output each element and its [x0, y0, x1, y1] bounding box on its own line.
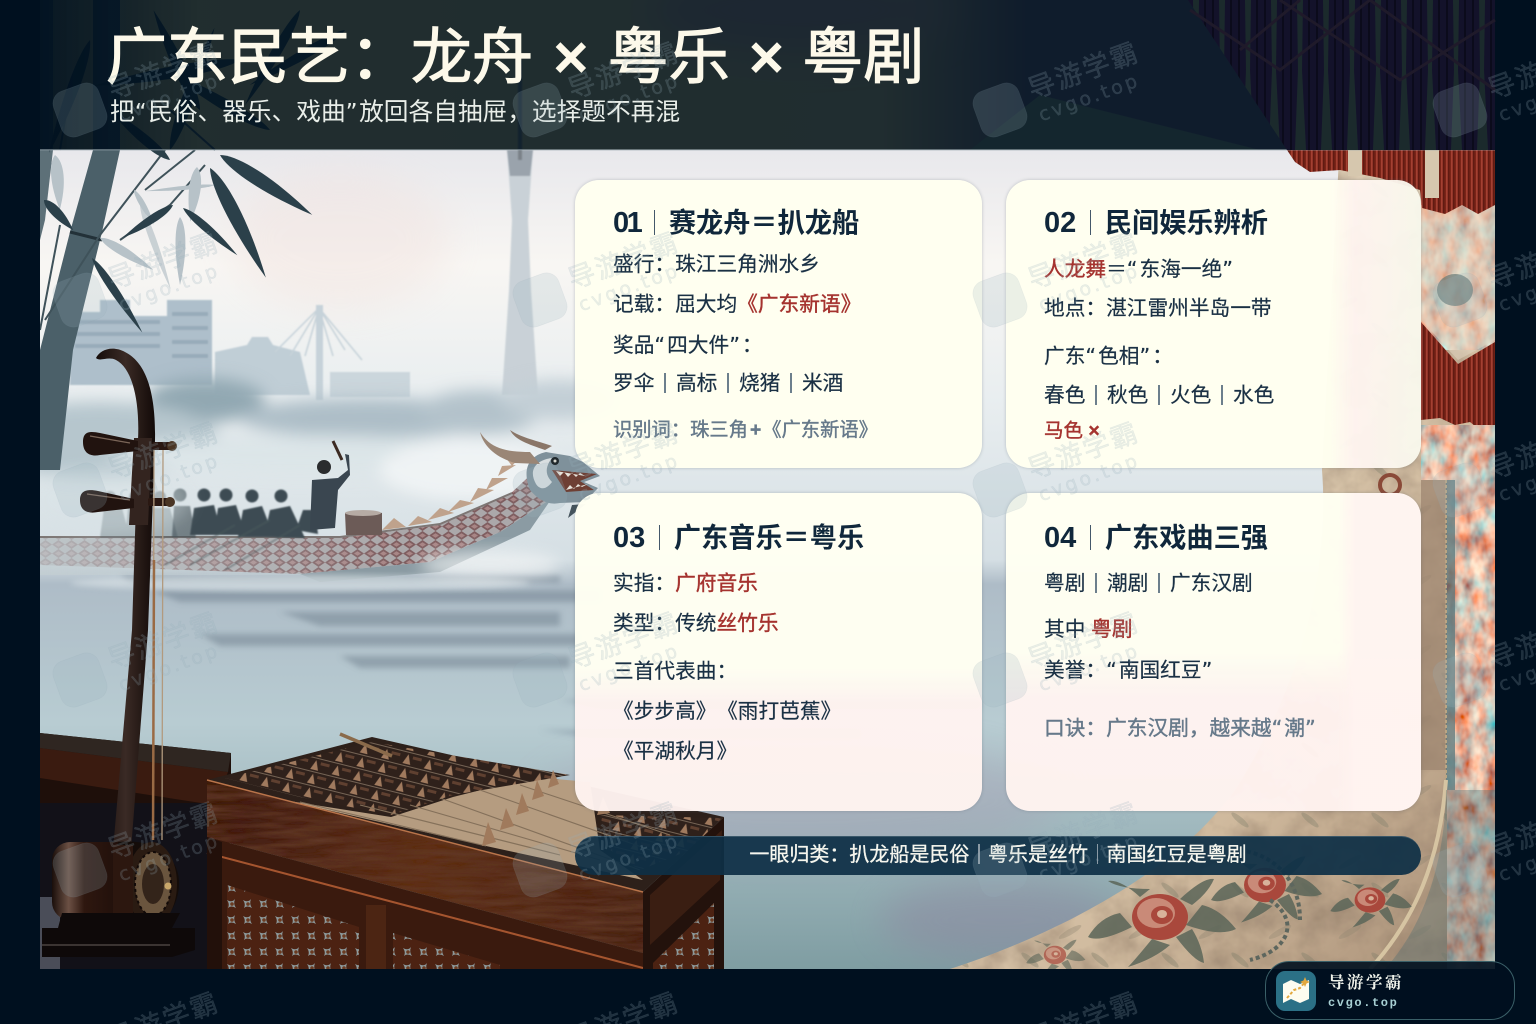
brand url: cvgo.top	[1328, 996, 1398, 1010]
curtain and embroidered drape	[950, 140, 1495, 975]
heading 01: 01 赛龙舟＝扒龙船	[613, 207, 859, 239]
watermarks: cvgo.top	[1036, 259, 1143, 316]
line: record: 记载：屈大均《广东新语》	[613, 293, 861, 316]
watermarks: cvgo.top	[116, 259, 223, 316]
line: colours label: 广东“色相”：	[1044, 344, 1173, 368]
line: three operas: 粤剧 潮剧 广东汉剧	[1044, 572, 1253, 595]
line: pieces one: 《步步高》 《雨打芭蕉》	[613, 700, 841, 723]
line: highlight: 其中 粤剧	[1044, 618, 1133, 641]
line: pieces label: 三首代表曲：	[613, 660, 737, 683]
watermarks: 导游学霸	[1022, 791, 1144, 867]
misty treeline	[0, 378, 620, 500]
bamboo	[40, 0, 348, 470]
line: excluded colour: 马色 ×	[1044, 420, 1100, 442]
watermarks: 导游学霸	[1022, 31, 1144, 107]
sky and river	[40, 0, 1338, 969]
summary bar: 一眼归类：扒龙船是民俗 粤乐是丝竹 南国红豆是粤剧	[749, 844, 1247, 866]
heading 03: 03 广东音乐＝粤乐	[613, 522, 864, 554]
watermarks: cvgo.top	[116, 449, 223, 506]
watermarks: 导游学霸	[102, 31, 224, 107]
panel: 03 Cantonese music	[575, 493, 982, 811]
watermarks: cvgo.top	[576, 259, 683, 316]
watermarks: 导游学霸	[102, 601, 224, 677]
heading 04: 04 广东戏曲三强	[1044, 522, 1268, 554]
watermarks: 导游学霸	[562, 411, 684, 487]
watermarks: 导游学霸	[562, 601, 684, 677]
panel: 02 folk entertainment	[1006, 180, 1421, 468]
line: region: 盛行：珠江三角洲水乡	[613, 253, 820, 276]
city skyline with bridge and Canton Tower	[70, 60, 538, 400]
dragon boat	[30, 430, 600, 591]
watermarks: cvgo.top	[116, 69, 223, 126]
header dark band	[40, 0, 1495, 150]
subtitle: 把“民俗、器乐、戏曲”放回各自抽屉，选择题不再混	[110, 99, 680, 126]
watermarks: 导游学霸	[562, 31, 684, 107]
line: four prizes: 罗伞 高标 烧猪 米酒	[613, 372, 843, 395]
line: type: 类型：传统丝竹乐	[613, 612, 779, 635]
line: human dragon dance: 人龙舞＝“东海一绝”	[1044, 257, 1235, 281]
line: meaning: 实指：广府音乐	[613, 572, 758, 595]
icon: map logo	[1276, 971, 1316, 1011]
watermarks: 导游学霸	[102, 221, 224, 297]
note: mnemonic: 口诀：广东汉剧，越来越“潮”	[1044, 716, 1318, 740]
watermarks: 导游学霸	[562, 791, 684, 867]
watermarks: cvgo.top	[576, 449, 683, 506]
drummer and drum	[310, 441, 382, 535]
brand badge	[1265, 961, 1515, 1020]
yangqin dulcimer and side cabinet	[40, 733, 724, 970]
paddlers	[100, 488, 318, 570]
watermarks: cvgo.top	[576, 639, 683, 696]
summary bar	[575, 836, 1421, 875]
watermarks: 导游学霸	[1022, 601, 1144, 677]
watermarks: cvgo.top	[576, 829, 683, 886]
line: honour: 美誉：“南国红豆”	[1044, 658, 1214, 682]
watermarks: cvgo.top	[576, 69, 683, 126]
watermarks: 导游学霸	[1022, 411, 1144, 487]
heading 02: 02 民间娱乐辨析	[1044, 207, 1268, 239]
brand name: 导游学霸	[1328, 969, 1404, 993]
line: prizes label: 奖品“四大件”：	[613, 333, 763, 357]
watermarks: cvgo.top	[1036, 449, 1143, 506]
watermarks: cvgo.top	[1036, 69, 1143, 126]
erhu	[42, 349, 195, 957]
watermarks: cvgo.top	[1036, 829, 1143, 886]
panel: 04 Guangdong opera	[1006, 493, 1421, 811]
line: place: 地点：湛江雷州半岛一带	[1044, 297, 1272, 320]
line: pieces two: 《平湖秋月》	[613, 740, 737, 763]
watermarks: cvgo.top	[116, 639, 223, 696]
watermarks: cvgo.top	[1036, 639, 1143, 696]
watermarks: 导游学霸	[102, 411, 224, 487]
title: 广东民艺：龙舟 × 粤乐 × 粤剧	[106, 7, 924, 96]
dragon head	[480, 430, 600, 518]
watermarks: 导游学霸	[1022, 221, 1144, 297]
watermarks: 导游学霸	[102, 791, 224, 867]
watermarks: cvgo.top	[116, 829, 223, 886]
watermarks: 导游学霸	[562, 221, 684, 297]
river reflections	[122, 573, 575, 736]
note: keywords: 识别词：珠三角+《广东新语》	[613, 420, 878, 441]
line: four colours: 春色 秋色 火色 水色	[1044, 384, 1274, 407]
panel: 01 dragon boat	[575, 180, 982, 468]
